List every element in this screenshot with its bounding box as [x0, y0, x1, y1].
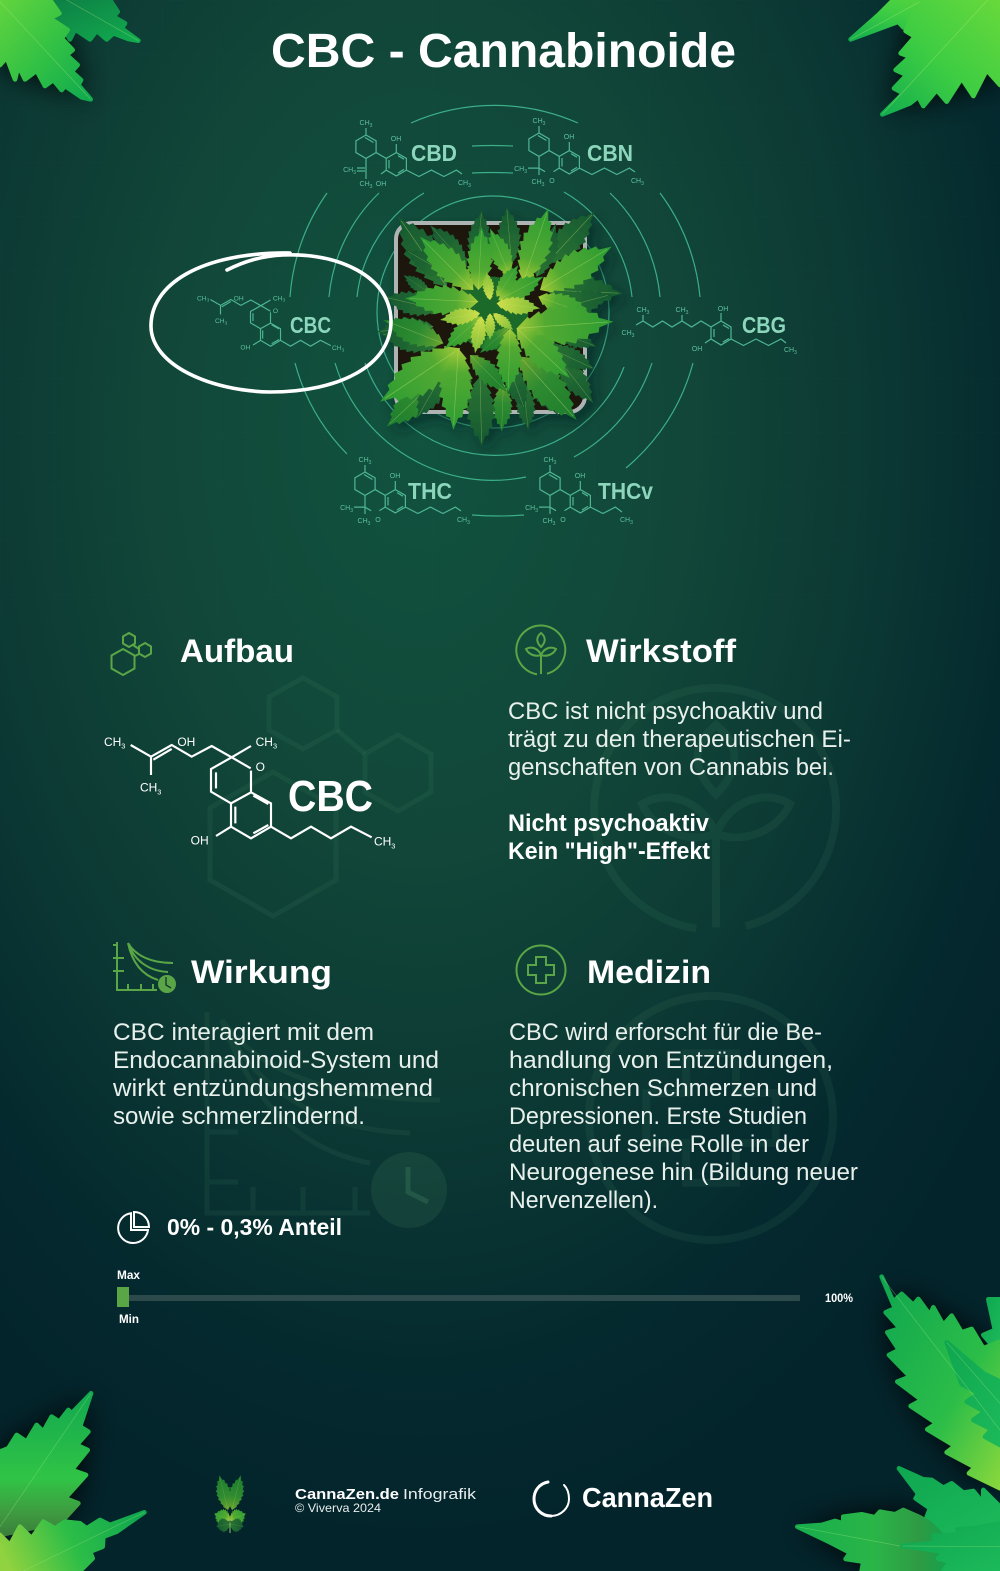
- bold statement: Nicht psychoaktiv: [508, 810, 710, 837]
- watermark: chart icon behind Wirkung: [207, 1012, 447, 1228]
- molecule: CBC (small): OH: [240, 345, 251, 352]
- plant in pot: [369, 202, 624, 447]
- molecule: CBN: O: [549, 178, 555, 185]
- heading: Aufbau: [180, 633, 294, 669]
- molecule: CBG: 3: [794, 350, 797, 356]
- molecule: CBC large: OH: [177, 735, 195, 749]
- label: 100%: 100%: [825, 1291, 853, 1305]
- molecule: CBG: CH: [622, 330, 632, 337]
- molecule: CBC large: [104, 735, 395, 850]
- text block: CBC ist nicht psychoaktiv und: [508, 698, 823, 725]
- molecule: CBN: CH: [631, 178, 641, 185]
- molecule: THCv: CH: [544, 457, 554, 464]
- bold statement: [508, 810, 710, 865]
- heading: Medizin: [587, 954, 711, 990]
- molecule: THC: CH: [358, 518, 368, 525]
- molecule: CBD: 3: [370, 184, 373, 190]
- molecule: THCv: [525, 457, 633, 527]
- molecule: CBG: CH: [676, 307, 686, 314]
- heading: Wirkstoff: [586, 633, 736, 669]
- text block: [112, 1019, 439, 1130]
- molecule: THCv: CH: [525, 505, 535, 512]
- molecule: THC: OH: [390, 473, 400, 480]
- molecule: CBD: CH: [360, 181, 370, 188]
- share indicator: [117, 1212, 853, 1326]
- molecule: THCv: O: [560, 517, 566, 524]
- molecule: CBD: 3: [353, 170, 356, 176]
- corner leaves: bottom right: [797, 1277, 1000, 1571]
- molecule: CBN: CH: [514, 166, 524, 173]
- molecule: CBD: OH: [391, 136, 401, 143]
- molecule: CBC (small): CH: [215, 318, 225, 325]
- molecule: CBD: CH: [343, 167, 353, 174]
- molecule: CBN: CH: [532, 179, 542, 186]
- molecule: CBC (small): CH: [197, 295, 207, 302]
- molecule: CBG: CH: [637, 307, 647, 314]
- molecule: THC: O: [375, 517, 381, 524]
- text block: deuten auf seine Rolle in der: [509, 1131, 809, 1158]
- molecule: CBN: 3: [524, 169, 527, 175]
- molecule: CBC large: O: [256, 760, 265, 774]
- section: Aufbau: [104, 633, 395, 850]
- leaves: [369, 202, 624, 447]
- icon: plant in circle: [516, 625, 565, 674]
- molecule: THC: 3: [467, 520, 470, 526]
- molecule: CBC large: 3: [157, 787, 161, 796]
- molecule: CBC (small): O: [273, 308, 278, 315]
- molecule: THCv: CH: [543, 518, 553, 525]
- concentric circles around plant: [290, 105, 700, 516]
- molecule: CBG: CH: [784, 347, 794, 354]
- label: CBD: CBD: [411, 140, 457, 166]
- text block: Neurogenese hin (Bildung neuer: [509, 1159, 858, 1186]
- footer credit: Infografik: [403, 1487, 477, 1503]
- text block: Depressionen. Erste Studien: [509, 1103, 807, 1130]
- molecule: CBN: OH: [564, 134, 574, 141]
- molecule: THCv: 3: [630, 520, 633, 526]
- molecule: CBC (small): CH: [332, 345, 342, 352]
- title: CBC - Cannabinoide: [271, 25, 736, 78]
- molecule: THC: CH: [359, 457, 369, 464]
- footer credit: CannaZen.de: [295, 1487, 399, 1503]
- label: CBN: CBN: [587, 140, 633, 166]
- molecule: CBG: 3: [647, 310, 650, 316]
- text block: CBC wird erforscht für die Be-: [509, 1019, 822, 1046]
- molecule: CBD: CH: [360, 120, 370, 127]
- watermark: hexagons behind Aufbau: [210, 678, 431, 916]
- text block: wirkt entzündungshemmend: [112, 1075, 433, 1102]
- molecule: CBG: 3: [632, 333, 635, 339]
- label: min: Min: [119, 1314, 139, 1326]
- icon: decay chart with clock: [113, 942, 176, 993]
- molecule: CBG: 3: [686, 310, 689, 316]
- icon: pie chart: [118, 1212, 149, 1243]
- section: Wirkstoff: [508, 625, 851, 865]
- corner leaves: bottom left: [0, 1393, 144, 1571]
- footer credit: © Viverva 2024: [295, 1501, 381, 1515]
- logo ring: [534, 1482, 569, 1516]
- share label: 0% - 0,3% Anteil: [167, 1214, 342, 1240]
- corner leaves: top right: [851, 0, 1000, 114]
- molecule: THC: CH: [457, 517, 467, 524]
- molecule: CBG: OH: [692, 346, 702, 353]
- bold statement: Kein "High"-Effekt: [508, 838, 710, 865]
- molecule: CBN: 3: [641, 181, 644, 187]
- molecule: CBC large: CH: [104, 735, 121, 749]
- text block: sowie schmerzlindernd.: [113, 1103, 365, 1130]
- molecule: CBC large: 3: [391, 841, 395, 850]
- molecule: CBC (small): 3: [207, 298, 210, 303]
- molecule: THC: [340, 457, 470, 527]
- icon: cross in circle: [516, 946, 566, 994]
- corner leaves: top left: [0, 0, 138, 99]
- molecule: CBN: CH: [533, 118, 543, 125]
- molecule: CBC (small): CH: [273, 295, 282, 302]
- molecule: CBC large: OH: [191, 833, 209, 847]
- icon: leaf hand: [211, 1473, 249, 1534]
- heading: Wirkung: [191, 954, 332, 990]
- molecule: CBN: 3: [543, 121, 546, 127]
- molecule: THC: 3: [368, 521, 371, 527]
- molecule: CBD: OH: [376, 181, 386, 188]
- icon: hexagons: [112, 633, 151, 675]
- footer credit: [295, 1487, 477, 1515]
- molecule: CBC large: 3: [121, 742, 125, 751]
- molecule: THCv: 3: [554, 460, 557, 466]
- molecule: THCv: 3: [535, 508, 538, 514]
- section: Wirkung: [112, 942, 439, 1130]
- label: CBC: CBC: [290, 312, 331, 338]
- molecule: CBC (small): OH: [234, 295, 244, 302]
- watermark: cross icon behind Medizin: [589, 996, 833, 1240]
- text block: genschaften von Cannabis bei.: [508, 754, 834, 781]
- molecule: CBC large: CH: [374, 835, 391, 849]
- text block: trägt zu den therapeutischen Ei-: [508, 726, 851, 753]
- text block: Nervenzellen).: [509, 1187, 658, 1214]
- text block: CBC interagiert mit dem: [113, 1019, 374, 1046]
- watermark: plant icon behind Wirkstoff: [594, 688, 836, 929]
- molecule: THCv: 3: [553, 521, 556, 527]
- text block: handlung von Entzündungen,: [509, 1047, 833, 1074]
- text block: chronischen Schmerzen und: [509, 1075, 817, 1102]
- text block: [509, 1019, 858, 1214]
- molecule: CBC (small): 3: [282, 298, 285, 303]
- molecule: CBG: OH: [718, 306, 728, 313]
- label: THCv: THCv: [598, 478, 653, 504]
- molecule: CBD: 3: [370, 123, 373, 129]
- molecule: CBC (small): [197, 295, 345, 353]
- label: THC: THC: [408, 478, 452, 504]
- molecule: CBD: [343, 120, 471, 190]
- molecule: THC: CH: [340, 505, 350, 512]
- hand-drawn circle highlighting CBC: [151, 253, 391, 392]
- molecule: CBG: [622, 306, 797, 356]
- molecule: THCv: OH: [575, 473, 585, 480]
- molecule: CBC (small): 3: [342, 348, 345, 353]
- bar track: [117, 1295, 800, 1301]
- text block: [508, 698, 851, 781]
- section: Medizin: [509, 946, 858, 1214]
- molecule: CBD: 3: [468, 183, 471, 189]
- label: CBG: CBG: [742, 312, 786, 338]
- label: CBC large: CBC: [288, 772, 373, 821]
- molecule: THC: 3: [369, 460, 372, 466]
- molecule: CBC (small): 3: [225, 321, 228, 326]
- molecule: CBN: [514, 118, 644, 188]
- molecule: CBC large: CH: [256, 735, 273, 749]
- molecule: THC: 3: [350, 508, 353, 514]
- molecule: CBN: 3: [542, 182, 545, 188]
- molecule: CBC large: 3: [273, 742, 277, 751]
- label: max: Max: [117, 1270, 141, 1282]
- pot: [396, 223, 585, 412]
- molecule: THCv: CH: [620, 517, 630, 524]
- logo wordmark: CannaZen: [582, 1482, 713, 1513]
- molecule: CBC large: CH: [140, 781, 157, 795]
- text block: Endocannabinoid-System und: [113, 1047, 439, 1074]
- bar value: [117, 1287, 129, 1307]
- molecule: CBD: CH: [458, 180, 468, 187]
- footer: [211, 1473, 713, 1534]
